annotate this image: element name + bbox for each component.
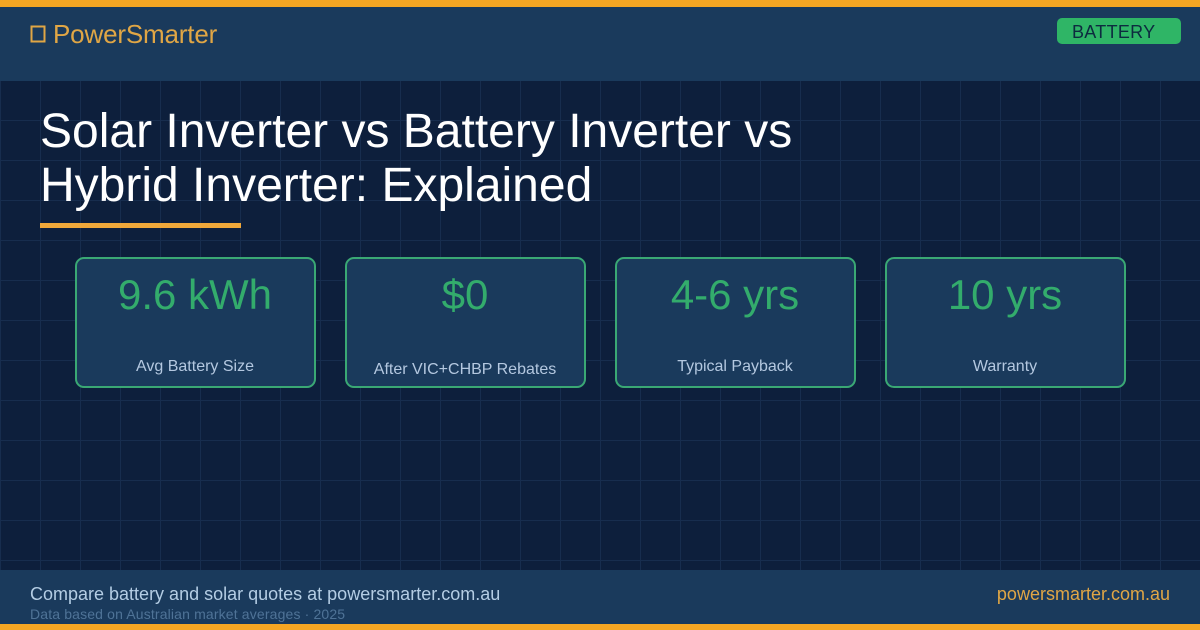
footer bar xyxy=(0,570,1200,630)
data source note: Data based on Australian market averages · 2025 xyxy=(30,606,345,622)
stat card: battery size xyxy=(76,258,315,387)
title xyxy=(40,105,792,212)
title: Hybrid Inverter: Explained xyxy=(40,159,592,212)
stat card: rebates: $0 xyxy=(442,271,488,318)
stat card: warranty: 10 yrs xyxy=(948,271,1062,318)
stat card: warranty: Warranty xyxy=(973,358,1037,375)
stat card: payback xyxy=(616,258,855,387)
logo: PowerSmarter xyxy=(53,19,218,49)
stat card: rebates: After VIC+CHBP Rebates xyxy=(374,361,556,378)
category badge xyxy=(1057,18,1181,44)
stat card: battery size: 9.6 kWh xyxy=(118,271,272,318)
stat card: warranty xyxy=(886,258,1125,387)
stat card: battery size: Avg Battery Size xyxy=(136,358,254,375)
stat card: payback: Typical Payback xyxy=(677,358,794,375)
title underline xyxy=(40,223,241,228)
category badge: BATTERY xyxy=(1072,22,1155,42)
header bar xyxy=(0,0,1200,81)
stat card: rebates xyxy=(346,258,585,387)
title: Solar Inverter vs Battery Inverter vs xyxy=(40,105,792,158)
stat card: payback: 4-6 yrs xyxy=(671,271,799,318)
footer url: powersmarter.com.au xyxy=(997,584,1170,604)
footer call to action: Compare battery and solar quotes at powersmarter.com.au xyxy=(30,584,500,604)
